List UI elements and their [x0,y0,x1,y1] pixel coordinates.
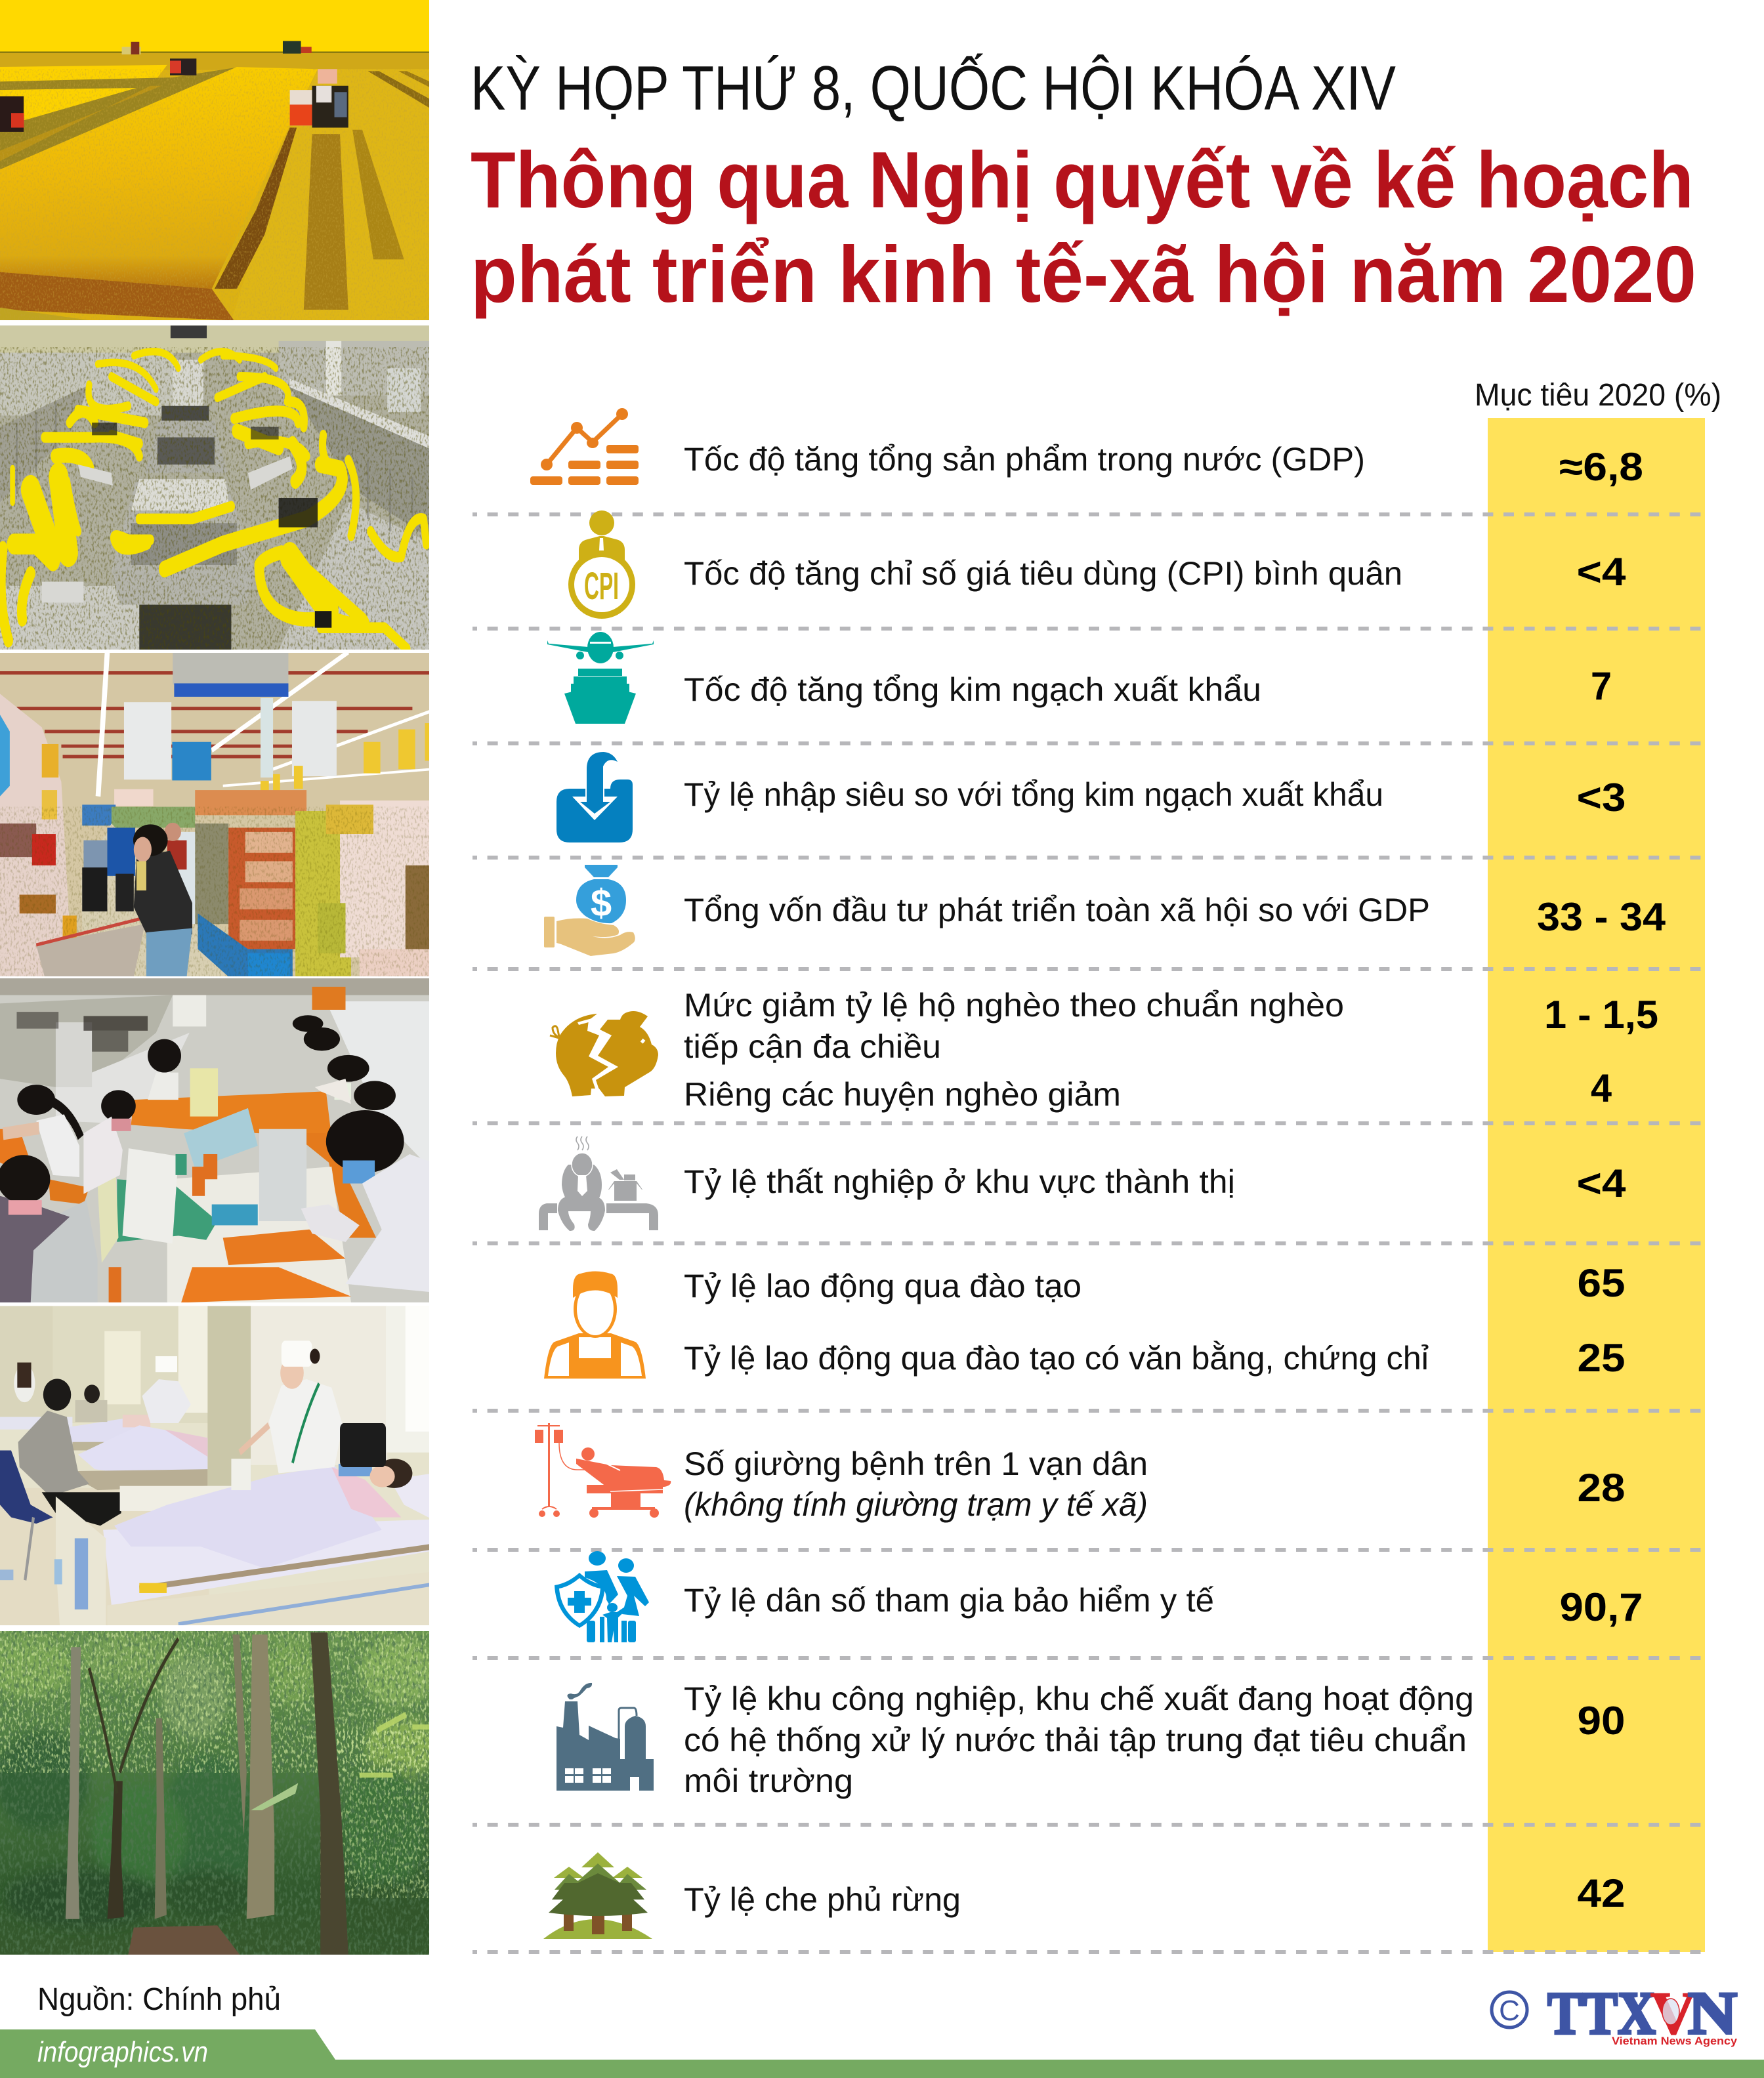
row label: forest cover: Tỷ lệ che phủ rừng [684,1881,961,1918]
row label: hospital beds: (không tính giường trạm y tế xã) [684,1486,1148,1523]
value: hospital beds: 28 [1578,1466,1625,1510]
title: session line: KỲ HỌP THỨ 8, QUỐC HỘI KHÓA XIV [471,52,1396,123]
value: insurance: 90,7 [1559,1585,1643,1629]
row label: CPI: Tốc độ tăng chỉ số giá tiêu dùng (CPI) bình quân [684,555,1402,592]
row label: investment: Tổng vốn đầu tư phát triển toàn xã hội so với GDP [684,892,1430,928]
logo: TTXVN: V [1650,1980,1696,2047]
value: exports: 7 [1591,664,1612,708]
row label: GDP: Tốc độ tăng tổng sản phẩm trong nước (GDP) [684,441,1365,478]
icon: broken piggy bank [550,1011,658,1096]
icon: worker [544,1272,646,1379]
row label: poverty reduction: Riêng các huyện nghèo giảm [684,1076,1121,1113]
title: headline: phát triển kinh tế-xã hội năm 2020 [471,230,1696,319]
site name: infographics.vn [37,2036,208,2068]
values: trained labor [1578,1261,1625,1380]
icon: forest [543,1852,652,1939]
icon: CPI person: CPI [584,565,619,608]
harvesters small [0,41,312,132]
logo: TTXVN: N [1688,1980,1737,2047]
logo: TTXVN [1547,1980,1737,2047]
row label: unemployment: Tỷ lệ thất nghiệp ở khu vực thành thị [684,1163,1235,1200]
row label: hospital beds: Số giường bệnh trên 1 vạn dân [684,1445,1148,1482]
source text: Nguồn: Chính phủ [37,1982,281,2017]
photo: forest [0,1631,440,1957]
value: industrial zones: 90 [1578,1699,1625,1743]
green footer band [0,2029,1764,2078]
photo: car factory robots [0,325,432,651]
icon: money bag on hand: $ [591,882,612,925]
icon: unemployed person on bench [539,1136,658,1231]
value: CPI: <4 [1576,550,1626,594]
icon: plane and ship [547,632,654,724]
icon: GDP growth chart [530,408,639,485]
icon: health insurance family [555,1551,649,1642]
row label: exports: Tốc độ tăng tổng kim ngạch xuất khẩu [684,671,1261,708]
values: poverty reduction: 4 [1591,1066,1612,1110]
title: headline [471,135,1696,319]
logo: TTXVN: TTX [1547,1980,1656,2047]
yellow target column [1488,418,1705,1952]
values: poverty reduction: 1 - 1,5 [1544,993,1658,1037]
icon: hospital bed [535,1423,671,1518]
row label: hospital beds [684,1445,1148,1523]
row label: insurance: Tỷ lệ dân số tham gia bảo hiểm y tế [684,1582,1214,1619]
row label: industrial zones: Tỷ lệ khu công nghiệp, khu chế xuất đang hoạt động [684,1680,1474,1717]
row label: industrial zones: có hệ thống xử lý nước thải tập trung đạt tiêu chuẩn [684,1722,1467,1758]
logo: copyright mark: C [1499,1995,1520,2027]
icon: money bag on hand [544,865,635,956]
title: headline: Thông qua Nghị quyết về kế hoạch [471,135,1694,224]
column header: Mục tiêu 2020 (%) [1475,378,1721,413]
row label: poverty reduction [684,987,1344,1113]
photo: garment workers [0,978,432,1305]
value: trade deficit: <3 [1576,776,1626,820]
row label: poverty reduction: Mức giảm tỷ lệ hộ nghèo theo chuẩn nghèo [684,987,1344,1024]
value: forest cover: 42 [1578,1871,1625,1915]
row label: industrial zones: môi trường [684,1762,853,1799]
value: investment: 33 - 34 [1537,895,1666,939]
value: GDP: ≈6,8 [1559,445,1643,489]
logo: Vietnam News Agency: Vietnam News Agency [1612,2035,1738,2047]
row label: trade deficit: Tỷ lệ nhập siêu so với tổng kim ngạch xuất khẩu [684,776,1383,813]
row label: trained labor: Tỷ lệ lao động qua đào tạo có văn bằng, chứng chỉ [684,1340,1429,1377]
icon: import arrow [556,752,633,842]
logo: copyright mark [1492,1992,1527,2027]
values: poverty reduction [1544,993,1658,1110]
photo: supermarket [0,652,432,978]
harvester large [290,69,348,128]
photo: rice harvest [0,0,432,321]
icon: CPI person [568,510,635,619]
row label: industrial zones [684,1680,1474,1799]
value: unemployment: <4 [1576,1161,1626,1205]
photo: hospital ward [0,1306,432,1629]
icon: factory [556,1683,654,1791]
row label: trained labor: Tỷ lệ lao động qua đào tạo [684,1268,1082,1304]
values: trained labor: 65 [1578,1261,1625,1305]
values: trained labor: 25 [1578,1336,1625,1380]
row label: trained labor [684,1268,1429,1377]
row label: poverty reduction: tiếp cận đa chiều [684,1028,941,1065]
